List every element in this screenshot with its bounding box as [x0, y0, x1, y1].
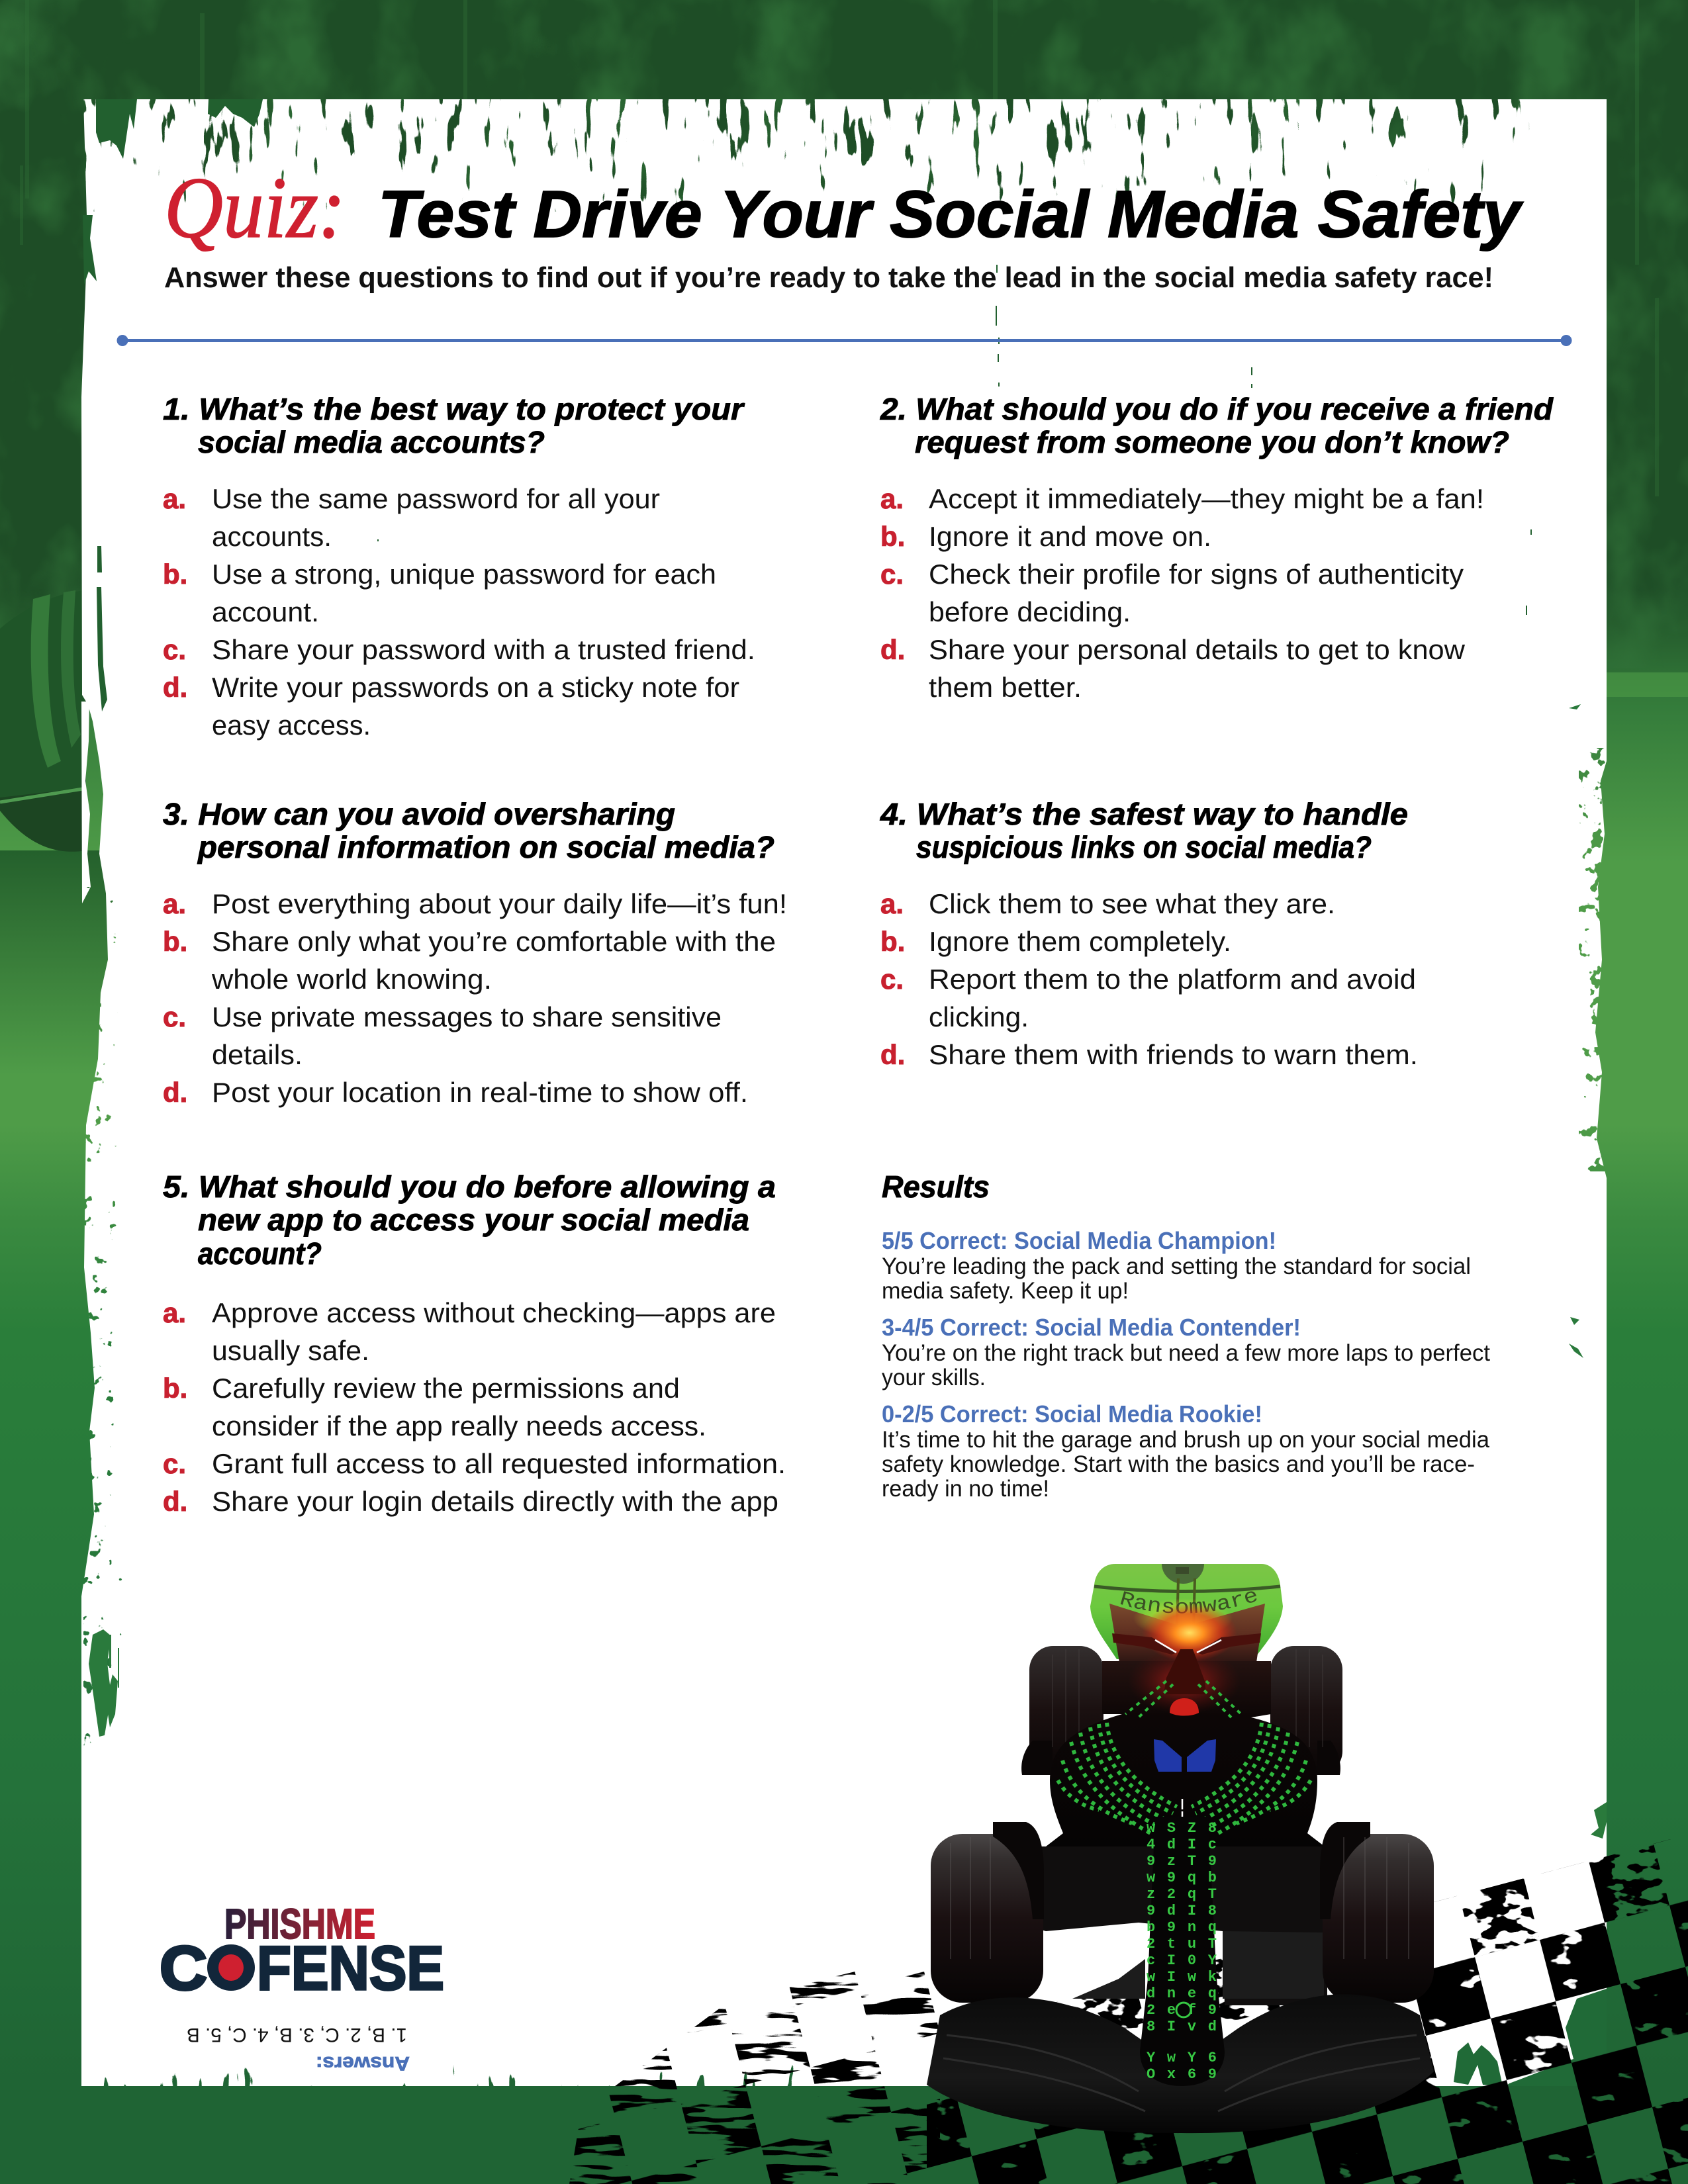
question 5 answers: consider if the app really needs access. [212, 1410, 706, 1441]
question 3 answers: c. [163, 1001, 186, 1032]
question 2 answers: c. [880, 559, 904, 590]
question 2 answers: Share your personal details to get to know [929, 634, 1466, 665]
result: rookie: safety knowledge. Start with the basics and you’ll be race- [882, 1451, 1475, 1477]
question 3 heading: 3. How can you avoid oversharing [163, 797, 675, 831]
question 2 answers: Ignore it and move on. [929, 521, 1211, 552]
matrix code on nose: w I w k [1147, 1969, 1217, 1985]
question 3 heading [163, 797, 774, 864]
red rear cap [1170, 1698, 1199, 1715]
question 1 answers: accounts. [212, 521, 332, 552]
question 5 answers: b. [163, 1373, 187, 1404]
question 2 heading: request from someone you don’t know? [915, 425, 1509, 459]
matrix code on nose: 4 d I c [1147, 1837, 1217, 1853]
question 2 heading [880, 392, 1554, 459]
question 1 heading [163, 392, 745, 459]
question 4 answers [880, 888, 1418, 1070]
logo: PhishMe Cofense: FENSE [257, 1933, 444, 2003]
matrix code on nose: 2 t u T [1147, 1936, 1217, 1952]
checker flag: distressed upper row of squares [927, 1835, 1688, 2105]
panel: question 1 [163, 392, 755, 741]
rear tires [1021, 1646, 1342, 1775]
front wing [927, 1994, 1434, 2133]
question 4 answers: c. [880, 964, 904, 995]
rear wing [1090, 1564, 1283, 1661]
answers key, printed upside down: Answers: [316, 2052, 410, 2074]
result: champion: You’re leading the pack and setting the standard for social [882, 1253, 1471, 1279]
front wing highlights [943, 2035, 1420, 2111]
logo: PhishMe Cofense: PHISHME [224, 1900, 375, 1948]
result: rookie: ready in no time! [882, 1476, 1049, 1502]
question 2 answers: b. [880, 521, 905, 552]
question 4 answers: d. [880, 1039, 905, 1070]
matrix code on nose: O x 6 9 [1147, 2066, 1217, 2083]
question 1 answers: b. [163, 559, 187, 590]
question 4 answers: Share them with friends to warn them. [929, 1039, 1418, 1070]
question 5 answers: c. [163, 1448, 186, 1479]
question 4 answers: Report them to the platform and avoid [929, 964, 1416, 995]
result: rookie: It’s time to hit the garage and brush up on your social media [882, 1427, 1490, 1453]
title: Test Drive Your Social Media Safety [378, 177, 1523, 251]
panel: question 3 [163, 797, 787, 1108]
question 4 answers: a. [880, 888, 904, 919]
question 1 answers: Write your passwords on a sticky note for [212, 672, 739, 703]
question 2 answers: Accept it immediately—they might be a fan! [929, 483, 1484, 514]
title [164, 159, 1523, 256]
question 5 answers [163, 1297, 786, 1517]
question 3 answers: d. [163, 1077, 187, 1108]
logo: PhishMe Cofense: C [160, 1933, 207, 2003]
edge splatter: green flecks on lower left and right [89, 704, 1607, 1839]
matrix code on nose: w 9 q b [1147, 1870, 1217, 1886]
question 1 answers: a. [163, 483, 186, 514]
matrix code on nose: d n e q [1147, 1985, 1217, 2002]
question 4 heading [880, 797, 1408, 864]
edge splatter: tears and green flecks around the paper [83, 99, 1532, 711]
nose cone [1140, 1817, 1225, 2086]
answers key, printed upside down [187, 2024, 410, 2074]
checker flag: green corner over the paper [1454, 1989, 1607, 2086]
question 2 heading: 2. What should you do if you receive a friend [880, 392, 1554, 426]
matrix code on nose: z 2 q T [1147, 1886, 1217, 1903]
panel: question 4 [880, 797, 1418, 1070]
exhaust glow [1112, 1604, 1261, 1714]
question 2 answers: them better. [929, 672, 1082, 703]
question 5 answers: d. [163, 1486, 187, 1517]
question 1 answers [163, 483, 755, 741]
matrix code on nose: 2 e f 9 [1147, 2002, 1217, 2019]
result: contender: your skills. [882, 1365, 986, 1390]
question 1 answers: Share your password with a trusted friend. [212, 634, 755, 665]
question 4 answers: b. [880, 926, 905, 957]
question 1 answers: account. [212, 596, 319, 627]
question 3 answers: Use private messages to share sensitive [212, 1001, 722, 1032]
subtitle: Answer these questions to find out if you’re ready to take the lead in the social media safety race! [164, 261, 1493, 294]
matrix code on nose: 8 I v d [1147, 2019, 1217, 2035]
matrix code on nose: c I 0 Y [1147, 1952, 1217, 1969]
question 2 answers: before deciding. [929, 596, 1131, 627]
title: Quiz: [164, 159, 346, 256]
rear wing: Ransomware [1120, 1591, 1256, 1614]
result: contender: 3-4/5 Correct: Social Media Contender! [882, 1314, 1301, 1341]
race car illustration [927, 1564, 1434, 2134]
question 1 answers: Use the same password for all your [212, 483, 660, 514]
question 3 answers: Post your location in real-time to show off. [212, 1077, 748, 1108]
engine cover and sidepods [1046, 1661, 1325, 1846]
result: rookie: 0-2/5 Correct: Social Media Rookie! [882, 1400, 1262, 1428]
panel: question 2 [880, 392, 1554, 703]
question 1 answers: Use a strong, unique password for each [212, 559, 716, 590]
question 1 heading: social media accounts? [198, 425, 545, 459]
question 5 heading [163, 1169, 776, 1271]
white centre marks [1182, 1799, 1183, 1817]
lower floor [1072, 1931, 1324, 1999]
question 2 answers: d. [880, 634, 905, 665]
question 2 answers: Check their profile for signs of authenticity [929, 559, 1464, 590]
answers key, printed upside down: 1. B, 2. C, 3. B, 4. C, 5. B [187, 2024, 407, 2046]
question 3 answers: Post everything about your daily life—it’s fun! [212, 888, 787, 919]
question 3 answers: whole world knowing. [211, 964, 492, 995]
question 5 heading: 5. What should you do before allowing a [163, 1169, 776, 1204]
result: champion [882, 1227, 1471, 1304]
matrix code on nose: Y w Y 6 [1147, 2050, 1217, 2066]
driver in cockpit [1154, 1739, 1216, 1772]
matrix code on nose [1147, 1820, 1217, 2083]
question 4 heading: suspicious links on social media? [916, 830, 1372, 864]
result: champion: 5/5 Correct: Social Media Champion! [882, 1227, 1276, 1254]
checker flag: solid black squares [927, 1901, 1688, 2184]
question 1 answers: d. [163, 672, 187, 703]
question 4 heading: 4. What’s the safest way to handle [880, 797, 1408, 831]
question 5 answers: Approve access without checking—apps are [212, 1297, 776, 1328]
question 1 heading: 1. What’s the best way to protect your [163, 392, 745, 426]
background: tunnel cylinder at left [0, 590, 86, 852]
front tires [931, 1822, 1434, 2003]
result: contender: You’re on the right track but need a few more laps to perfect [882, 1340, 1490, 1366]
matrix code on nose: 9 d I 8 [1147, 1903, 1217, 1919]
question 2 answers: a. [880, 483, 904, 514]
question 3 heading: personal information on social media? [197, 830, 774, 864]
question 3 answers: a. [163, 888, 186, 919]
matrix code on nose: b 9 n q [1147, 1919, 1217, 1936]
question 5 answers: Grant full access to all requested information. [212, 1448, 786, 1479]
results heading: Results [882, 1169, 990, 1204]
question 2 answers [880, 483, 1484, 703]
question 5 answers: Share your login details directly with the app [212, 1486, 778, 1517]
question 3 answers [163, 888, 787, 1108]
question 5 answers: Carefully review the permissions and [212, 1373, 680, 1404]
result: contender [882, 1314, 1490, 1390]
result: champion: media safety. Keep it up! [882, 1278, 1129, 1304]
question 5 heading: new app to access your social media [198, 1203, 749, 1237]
question 1 answers: easy access. [212, 709, 371, 741]
question 3 answers: details. [212, 1039, 303, 1070]
question 3 answers: Share only what you’re comfortable with the [212, 926, 776, 957]
question 4 answers: Ignore them completely. [929, 926, 1231, 957]
front suspension [1039, 1846, 1327, 2005]
question 4 answers: Click them to see what they are. [929, 888, 1335, 919]
question 4 answers: clicking. [929, 1001, 1029, 1032]
logo: PhishMe Cofense [160, 1900, 444, 2003]
checker flag: distressed squares left of the car [569, 1970, 940, 2184]
panel: question 5 [163, 1169, 786, 1517]
question 1 answers: c. [163, 634, 186, 665]
result: rookie [882, 1400, 1490, 1502]
matrix code on nose: w S Z 8 [1147, 1820, 1217, 1837]
matrix code on nose: 9 z T 9 [1147, 1853, 1217, 1870]
question 5 answers: a. [163, 1297, 186, 1328]
panel: results [882, 1169, 1490, 1502]
matrix code on bodywork [1058, 1681, 1311, 1833]
question 3 answers: b. [163, 926, 187, 957]
question 5 heading: account? [198, 1236, 322, 1271]
divider with end dots [117, 335, 1571, 346]
question 5 answers: usually safe. [212, 1335, 369, 1366]
